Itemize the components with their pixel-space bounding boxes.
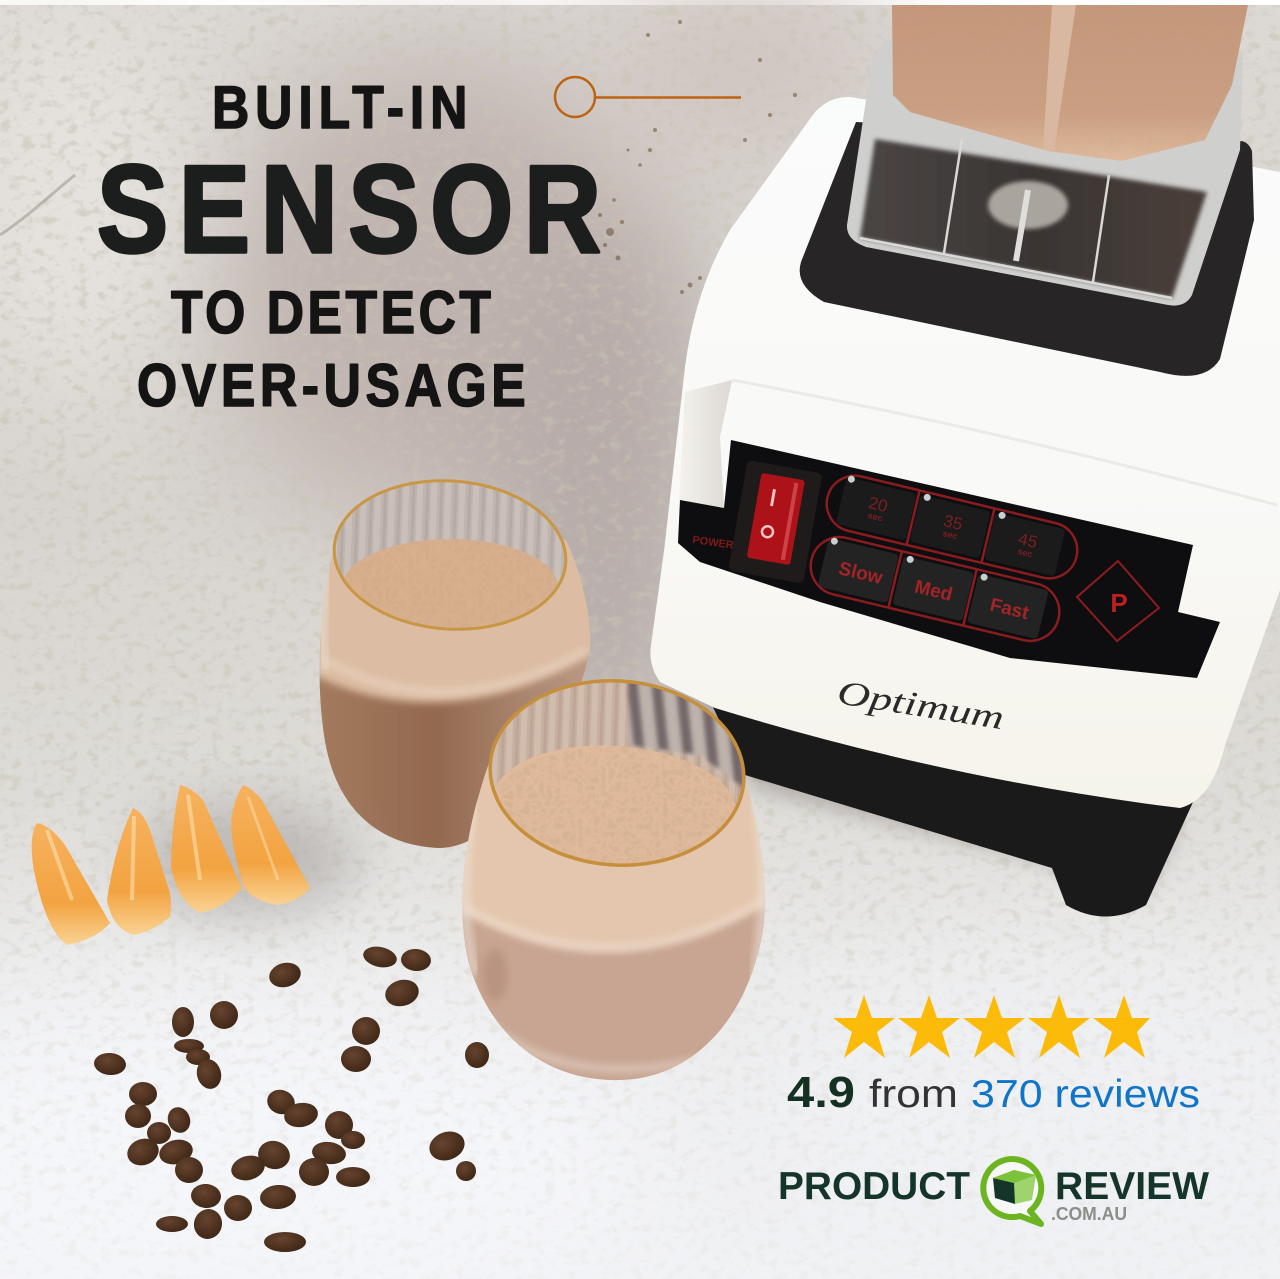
coffee beans [93, 944, 489, 1252]
back glass empty upper [336, 482, 564, 628]
headline line: over-usage: OVER-USAGE [137, 351, 526, 419]
headline line: built-in: BUILT-IN [212, 73, 467, 141]
rating text: from [869, 1073, 958, 1116]
time keys pill: 45 [1017, 529, 1039, 552]
blender hood seam [732, 380, 1277, 505]
orange segment 3 [171, 785, 242, 913]
panel black fascia [678, 440, 1220, 678]
speed keys pill: Fast [988, 595, 1031, 624]
orange segment 1 [32, 823, 110, 945]
blender shadow on the surface [660, 680, 1180, 900]
blender jar dark interior [860, 139, 1207, 298]
product review logo: REVIEW [1055, 1165, 1209, 1208]
logo speech bubble [983, 1159, 1041, 1224]
blender hood left flap [679, 380, 732, 508]
orange segment 4 [231, 785, 310, 905]
time keys pill: 35 [942, 511, 964, 534]
product review logo: .COM.AU [1051, 1204, 1127, 1224]
time keys pill [821, 470, 1083, 584]
headline line: sensor: SENSOR [97, 139, 601, 279]
speed keys pill: Med [913, 577, 954, 606]
pulse key: P [1110, 588, 1128, 618]
power switch [728, 460, 822, 584]
orange segment 2 [107, 808, 171, 935]
back glass of smoothie [320, 479, 590, 848]
orange segments [32, 785, 355, 945]
control panel [678, 440, 1220, 678]
blender jar blade and ribs [860, 139, 1172, 298]
front glass gold rim [484, 672, 750, 874]
product review logo [778, 1159, 1209, 1224]
five star rating [833, 995, 1150, 1058]
rating text [787, 1068, 1200, 1117]
blender [650, 5, 1280, 916]
sensor callout marker [555, 77, 741, 117]
blender white body [650, 97, 1280, 808]
headline line: to detect: TO DETECT [171, 278, 491, 346]
speed keys pill [805, 531, 1065, 647]
front glass of smoothie [462, 679, 765, 1080]
back glass gold rim [329, 473, 571, 637]
front glass liquid [462, 764, 765, 1080]
product review logo: PRODUCT [778, 1165, 970, 1208]
front glass empty upper [492, 682, 742, 864]
speed keys pill: Slow [837, 558, 885, 589]
power label: POWER [692, 534, 734, 552]
back glass liquid [320, 540, 590, 848]
headline [97, 73, 601, 419]
brand name: Optimum [835, 674, 1006, 737]
time keys pill: sec [942, 528, 959, 541]
pulse key [1077, 561, 1159, 641]
blender jar contents [892, 5, 1248, 161]
blender black base [712, 705, 1194, 916]
blender jar clear shell [847, 40, 1243, 306]
rating text: 4.9 [787, 1068, 855, 1117]
time keys pill: 20 [867, 493, 890, 516]
time keys pill: sec [867, 510, 884, 523]
blender black jar pad [800, 122, 1254, 376]
rating text: 370 reviews [971, 1073, 1200, 1116]
time keys pill: sec [1017, 546, 1033, 559]
